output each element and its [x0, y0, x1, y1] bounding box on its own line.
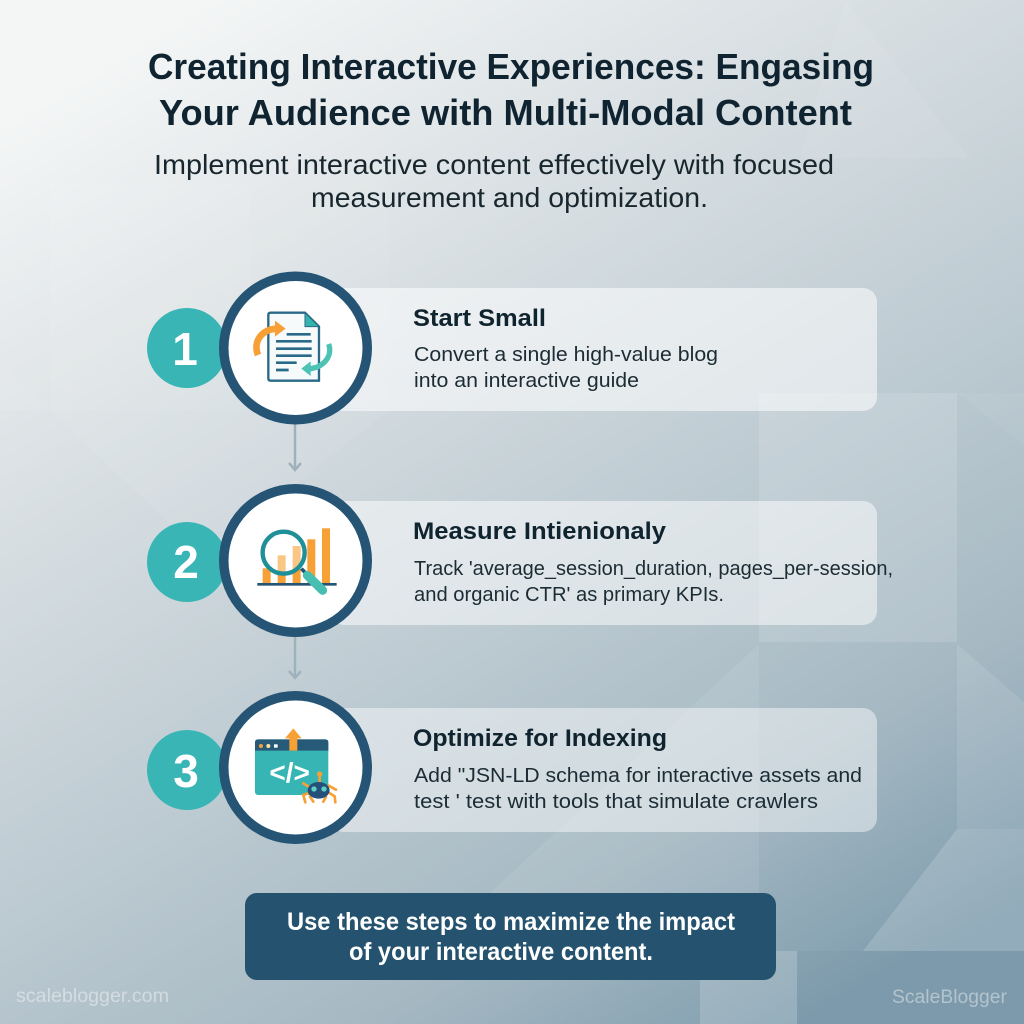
- step 2 text: Track 'average_session_duration, pages_per-session,: [414, 558, 893, 580]
- step 2 heading: Measure Intienionaly: [413, 518, 667, 545]
- icon circle 3: code window and crawler: [224, 696, 367, 839]
- number badge 2: 2: [173, 536, 199, 588]
- callout: [245, 893, 776, 980]
- number badge 1: [147, 308, 227, 388]
- arrow: step 2 to 3: [289, 637, 301, 678]
- icon circle 2: chart and magnifier: [224, 489, 367, 632]
- icon circle 1: document with arrows: [224, 276, 367, 420]
- callout: of your interactive content.: [349, 938, 653, 966]
- panel: step 3: [330, 708, 877, 832]
- subtitle: [154, 149, 834, 213]
- title: [148, 46, 874, 133]
- number badge 1: 1: [172, 323, 198, 375]
- title: Your Audience with Multi-Modal Content: [159, 92, 852, 133]
- number badge 2: [147, 522, 227, 602]
- step 1 text: into an interactive guide: [414, 370, 639, 392]
- step 2 text: [414, 558, 893, 606]
- arrow: step 1 to 2: [289, 424, 301, 470]
- footer: website: scaleblogger.com: [16, 986, 169, 1007]
- callout: Use these steps to maximize the impact: [287, 908, 736, 936]
- subtitle: measurement and optimization.: [311, 182, 708, 213]
- number badge 3: 3: [173, 745, 199, 797]
- icon circle 3: code window and crawler: </>: [269, 757, 310, 788]
- step 2 text: and organic CTR' as primary KPIs.: [414, 584, 724, 606]
- step 1 text: [414, 344, 718, 392]
- number badge 3: [147, 730, 227, 810]
- step 3 text: test ' test with tools that simulate crawlers: [414, 791, 818, 813]
- step 3 text: [414, 765, 862, 813]
- panel: step 1: [330, 288, 877, 411]
- step 1 text: Convert a single high-value blog: [414, 344, 718, 366]
- footer: brand: ScaleBlogger: [892, 987, 1008, 1008]
- step 1 heading: Start Small: [413, 305, 546, 332]
- title: Creating Interactive Experiences: Engasing: [148, 46, 874, 87]
- subtitle: Implement interactive content effectively with focused: [154, 149, 834, 180]
- step 3 heading: Optimize for Indexing: [413, 725, 667, 752]
- step 3 text: Add "JSN-LD schema for interactive assets and: [414, 765, 862, 787]
- panel: step 2: [330, 501, 893, 625]
